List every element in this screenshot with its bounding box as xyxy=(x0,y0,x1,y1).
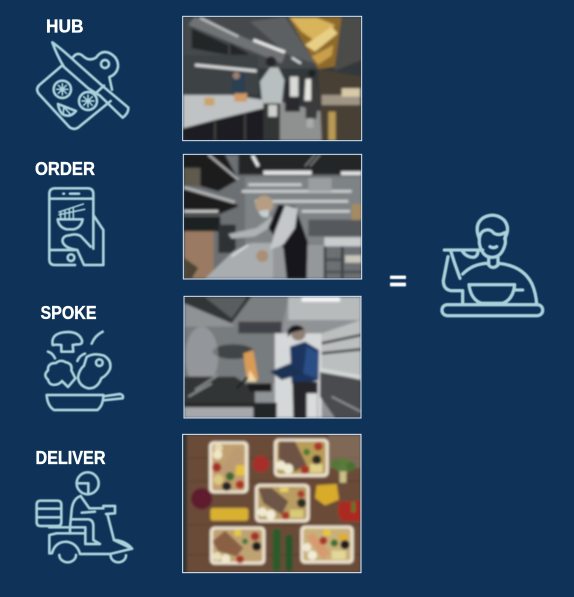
icon: delivery scooter rider xyxy=(37,472,132,562)
heading: DELIVER: DELIVER xyxy=(36,447,106,468)
icon: ingredients over frying pan xyxy=(45,332,123,410)
icon: person eating from a bowl xyxy=(442,215,543,316)
icon: cutting board and knife xyxy=(37,42,128,129)
photo: hub kitchen xyxy=(183,16,362,141)
heading: HUB: HUB xyxy=(46,16,84,36)
photo: order kitchen xyxy=(183,154,362,279)
equals sign xyxy=(390,276,406,286)
heading: SPOKE: SPOKE xyxy=(40,302,96,323)
photo: spoke kitchen xyxy=(184,296,361,418)
heading: ORDER: ORDER xyxy=(35,158,95,179)
photo: delivered meal boxes xyxy=(183,434,362,573)
icon: phone with noodle bowl and hand xyxy=(49,188,103,265)
